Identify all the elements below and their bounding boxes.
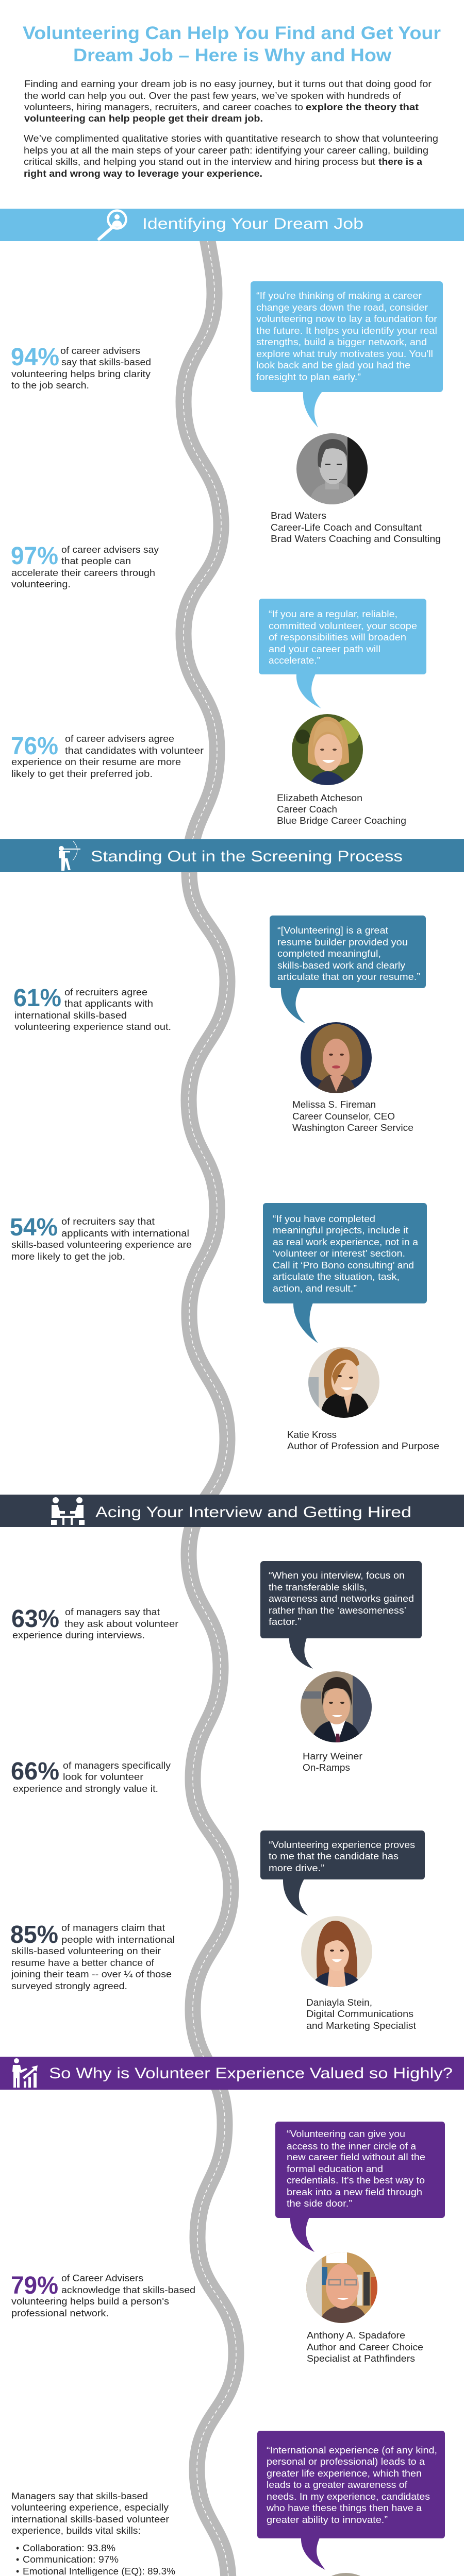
attribution: Katie Kross [287, 1430, 439, 1451]
intro paragraph 1: the world can help you out. Over the past few years, we’ve spoken with hundreds of [24, 91, 402, 101]
text block: vital skills list: volunteering experience, especially [11, 2502, 169, 2513]
callout: Katie Kross quote [263, 1203, 427, 1343]
stat: 97% [11, 543, 159, 589]
icon: presenter with rising chart [12, 2058, 38, 2088]
intro paragraph 2: right and wrong way to leverage your experience. [24, 168, 262, 179]
icon: two people at a table [51, 1497, 85, 1525]
intro paragraph 2: helps you at all the main steps of your career path: identifying your career calling, building [24, 145, 428, 156]
stat: 63%: they ask about volunteer [64, 1619, 178, 1629]
intro paragraph 1: volunteering can help people get their dream job. [24, 113, 263, 124]
callout: Anthony Spadafore quote: formal education and [287, 2164, 383, 2174]
callout: Harry Weiner quote: factor.” [269, 1617, 301, 1627]
icon: archer [59, 841, 80, 871]
text block: vital skills list [11, 2491, 175, 2576]
stat: 79% [11, 2272, 195, 2318]
text block: vital skills list: Communication: 97% [23, 2554, 119, 2565]
text block: vital skills list: Managers say that skills-based [11, 2491, 148, 2501]
attribution: Daniayla Stein: Daniayla Stein, [306, 1997, 372, 2008]
winding road [184, 227, 239, 2576]
section band: So Why is Volunteer Experience Valued so Highly? [0, 2057, 464, 2090]
callout: Harry B. Weiner quote: greater life experience, which then [267, 2468, 422, 2479]
callout: Brad Waters quote: “If you're thinking of making a career [256, 291, 422, 301]
intro paragraph 1: Finding and earning your dream job is no easy journey, but it turns out that doing good for [24, 79, 432, 89]
callout: Daniayla Stein quote [260, 1831, 425, 1916]
attribution: Harry Weiner: On-Ramps [303, 1762, 350, 1773]
stat: 54%: 54% [10, 1214, 58, 1241]
stat: 85% [10, 1921, 175, 1991]
photo: Anthony Spadafore [306, 2252, 377, 2323]
stat: 63%: of managers say that [65, 1607, 160, 1617]
stat: 61%: volunteering experience stand out. [14, 1022, 171, 1032]
stat: 66%: of managers specifically [63, 1760, 171, 1771]
callout: Harry B. Weiner quote: leads to a greater awareness of [267, 2480, 408, 2490]
stat: 94%: say that skills-based [61, 357, 151, 367]
callout: Harry B. Weiner quote: greater ability to innovate.” [267, 2515, 388, 2525]
callout: Daniayla Stein quote: more drive.” [269, 1863, 324, 1873]
stat: 79%: of Career Advisers [61, 2273, 143, 2283]
attribution: Harry Weiner: Harry Weiner [303, 1751, 362, 1761]
photo: Katie Kross [308, 1347, 379, 1418]
section band: Acing Your Interview and Getting Hired: Acing Your Interview and Getting Hired [95, 1504, 411, 1521]
attribution: Melissa Fireman: Melissa S. Fireman [292, 1099, 376, 1110]
callout: Harry B. Weiner quote: personal or professional) leads to a [267, 2456, 425, 2467]
callout: Anthony Spadafore quote: “Volunteering can give you [287, 2129, 405, 2139]
intro paragraph 2 [24, 133, 438, 179]
photo: Melissa Fireman [301, 1022, 372, 1093]
callout: Elizabeth Atcheson quote: committed volunteer, your scope [269, 621, 417, 631]
stat: 76%: 76% [11, 733, 58, 760]
stat: 61%: 61% [13, 985, 61, 1012]
stat: 76% [11, 733, 204, 779]
attribution: Brad Waters: Brad Waters Coaching and Consulting [271, 534, 441, 544]
intro paragraph 2: there is a [378, 157, 423, 167]
stat: 97%: of career advisers say [61, 545, 159, 555]
stat: 63%: 63% [11, 1605, 59, 1633]
stat: 79%: 79% [11, 2272, 58, 2299]
stat: 79%: volunteering helps build a person's [11, 2296, 169, 2307]
photo: Brad Waters [296, 433, 368, 504]
callout: Katie Kross quote: meaningful projects, include it [273, 1225, 408, 1235]
stat: 94%: 94% [11, 344, 59, 371]
callout: Brad Waters quote: change years down the road, consider [256, 302, 428, 313]
title: Dream Job – Here is Why and How [73, 45, 392, 65]
callout: Melissa Fireman quote [270, 916, 426, 1023]
callout: Harry Weiner quote: awareness and networks gained [269, 1594, 414, 1604]
callout: Elizabeth Atcheson quote: accelerate.” [269, 655, 320, 666]
attribution: Daniayla Stein: Digital Communications [306, 2009, 413, 2019]
callout: Daniayla Stein quote: to me that the candidate has [269, 1851, 399, 1861]
callout: Harry B. Weiner quote: “International experience (of any kind, [267, 2445, 437, 2455]
section band: Acing Your Interview and Getting Hired [0, 1495, 464, 1527]
callout: Brad Waters quote: foresight to plan early.” [256, 372, 361, 382]
stat: 79%: professional network. [11, 2308, 109, 2318]
callout: Elizabeth Atcheson quote: and your career path will [269, 644, 380, 654]
callout: Melissa Fireman quote: resume builder provided you [277, 937, 408, 947]
stat: 94%: of career advisers [60, 346, 140, 356]
stat: 76%: likely to get their preferred job. [11, 769, 153, 779]
stat: 63%: experience during interviews. [12, 1630, 145, 1640]
text block: vital skills list: Collaboration: 93.8% [23, 2543, 115, 2553]
callout: Katie Kross quote: as real work experience, not in a [273, 1237, 419, 1247]
section band: So Why is Volunteer Experience Valued so Highly?: So Why is Volunteer Experience Valued so Highly? [49, 2065, 453, 2082]
stat: 94%: to the job search. [11, 380, 89, 391]
callout: Elizabeth Atcheson quote: “If you are a regular, reliable, [269, 609, 397, 619]
section band: Standing Out in the Screening Process [0, 839, 464, 872]
stat: 85%: 85% [10, 1921, 58, 1948]
attribution: Brad Waters: Brad Waters [271, 511, 326, 521]
callout: Harry Weiner quote: the transferable skills, [269, 1582, 367, 1592]
callout: Katie Kross quote: action, and result.” [273, 1283, 357, 1294]
callout: Anthony Spadafore quote: access to the inner circle of a [287, 2141, 417, 2151]
stat: 66%: 66% [11, 1758, 59, 1785]
photo: Elizabeth Atcheson [292, 714, 363, 785]
callout: Brad Waters quote: volunteering now to lay a foundation for [256, 314, 437, 324]
stat: 76%: that candidates with volunteer [65, 745, 204, 756]
stat: 85%: of managers claim that [61, 1923, 165, 1933]
callout: Melissa Fireman quote: completed meaningful, [277, 948, 381, 959]
stat: 85%: people with international [61, 1935, 175, 1945]
attribution: Harry Weiner [303, 1751, 362, 1773]
callout: Melissa Fireman quote: skills-based work and clearly [277, 960, 405, 971]
attribution: Brad Waters [271, 511, 441, 544]
callout: Melissa Fireman quote: articulate that on your resume.” [277, 972, 420, 982]
callout: Brad Waters quote: explore what truly motivates you. You'll [256, 349, 433, 359]
callout: Harry B. Weiner quote: who have these things then have a [266, 2503, 422, 2513]
intro paragraph 2: We’ve complimented qualitative stories with quantitative research to show that volunteering [24, 133, 438, 144]
stat: 66% [11, 1758, 171, 1794]
attribution: Daniayla Stein [306, 1997, 416, 2031]
stat: 85%: resume have a better chance of [11, 1958, 155, 1968]
section band: Identifying Your Dream Job [0, 209, 464, 241]
text block: vital skills list: • [16, 2543, 19, 2553]
stat: 61% [13, 985, 171, 1032]
photo: Daniayla Stein [301, 1916, 372, 1987]
callout: Anthony Spadafore quote: break into a new field through [287, 2187, 422, 2197]
photo: Harry B. Weiner [332, 2573, 360, 2576]
callout: Elizabeth Atcheson quote [259, 599, 426, 708]
callout: Elizabeth Atcheson quote: of responsibilities will broaden [269, 632, 406, 642]
section band: Identifying Your Dream Job: Identifying Your Dream Job [142, 215, 363, 232]
attribution: Melissa Fireman: Career Counselor, CEO [292, 1111, 395, 1122]
callout: Brad Waters quote: look back and be glad you had the [256, 360, 410, 370]
callout: Katie Kross quote: Call it ‘Pro Bono consulting’ and [273, 1260, 414, 1270]
stat: 97%: volunteering. [11, 579, 71, 589]
callout: Katie Kross quote: “If you have completed [273, 1214, 375, 1224]
intro paragraph 2: critical skills, and helping you stand out in the interview and hiring process but [24, 157, 375, 167]
callout: Katie Kross quote: articulate the situation, task, [273, 1272, 400, 1282]
stat: 54% [10, 1214, 192, 1262]
section band: Standing Out in the Screening Process: Standing Out in the Screening Process [91, 848, 403, 865]
attribution: Katie Kross: Author of Profession and Purpose [287, 1441, 439, 1451]
text block: vital skills list: • [16, 2554, 19, 2565]
stat: 61%: of recruiters agree [64, 987, 147, 997]
callout: Harry B. Weiner quote: needs. In my experience, candidates [267, 2492, 430, 2502]
stat: 76%: experience on their resume are more [11, 757, 181, 767]
stat: 54%: skills-based volunteering experience are [11, 1240, 192, 1250]
stat: 97%: 97% [11, 543, 58, 570]
stat: 79%: acknowledge that skills-based [61, 2285, 195, 2295]
photo: Harry Weiner [301, 1671, 372, 1742]
stat: 85%: joining their team -- over ¼ of those [11, 1969, 172, 1979]
callout: Melissa Fireman quote: “[Volunteering] is a great [277, 925, 388, 936]
text block: vital skills list: experience, builds vital skills: [11, 2526, 141, 2536]
attribution: Katie Kross: Katie Kross [287, 1430, 337, 1440]
attribution: Brad Waters: Career-Life Coach and Consultant [271, 522, 422, 533]
callout: Brad Waters quote [251, 281, 443, 428]
callout: Katie Kross quote: ‘volunteer or interest’ section. [273, 1248, 405, 1259]
callout: Harry Weiner quote: “When you interview, focus on [269, 1570, 405, 1581]
title [23, 23, 441, 65]
stat: 97%: accelerate their careers through [11, 568, 155, 578]
callout: Daniayla Stein quote: “Volunteering experience proves [269, 1840, 415, 1850]
stat: 76%: of career advisers agree [65, 734, 174, 744]
attribution: Daniayla Stein: and Marketing Specialist [306, 2021, 416, 2031]
callout: Brad Waters quote: strengths, build a bigger network, and [256, 337, 427, 347]
stat: 61%: international skills-based [14, 1010, 127, 1021]
stat: 94%: volunteering helps bring clarity [11, 369, 151, 379]
title: Volunteering Can Help You Find and Get Your [23, 23, 441, 43]
callout: Harry B. Weiner quote [257, 2431, 445, 2570]
callout: Harry Weiner quote [260, 1561, 422, 1669]
callout: Anthony Spadafore quote: the side door.” [287, 2198, 352, 2209]
attribution: Elizabeth Atcheson [277, 793, 406, 826]
stat: 54%: applicants with international [61, 1228, 189, 1239]
callout: Brad Waters quote: the future. It helps you identify your real [256, 326, 437, 336]
icon: magnifying glass with person [99, 210, 126, 239]
stat: 61%: that applicants with [64, 998, 153, 1009]
text block: vital skills list: international skills-based volunteer [11, 2514, 169, 2524]
attribution: Elizabeth Atcheson: Elizabeth Atcheson [277, 793, 362, 803]
stat: 85%: surveyed strongly agreed. [11, 1981, 127, 1991]
attribution: Elizabeth Atcheson: Career Coach [277, 804, 337, 815]
attribution: Anthony Spadafore: Anthony A. Spadafore [307, 2330, 405, 2341]
stat: 63% [11, 1605, 178, 1640]
stat: 66%: experience and strongly value it. [13, 1784, 158, 1794]
attribution: Anthony Spadafore [307, 2330, 423, 2364]
intro paragraph 1 [24, 79, 432, 124]
attribution: Anthony Spadafore: Author and Career Choice [307, 2342, 423, 2352]
stat: 54%: of recruiters say that [61, 1216, 155, 1227]
stat: 66%: look for volunteer [63, 1772, 143, 1782]
attribution: Melissa Fireman [292, 1099, 413, 1133]
attribution: Elizabeth Atcheson: Blue Bridge Career Coaching [277, 816, 406, 826]
attribution: Anthony Spadafore: Specialist at Pathfinders [307, 2353, 415, 2364]
callout: Anthony Spadafore quote: new career field without all the [287, 2152, 425, 2162]
stat: 85%: skills-based volunteering on their [11, 1946, 161, 1956]
intro paragraph 1: explore the theory that [306, 102, 419, 112]
stat: 97%: that people can [61, 556, 131, 566]
attribution: Melissa Fireman: Washington Career Service [292, 1123, 413, 1133]
stat: 54%: more likely to get the job. [11, 1251, 125, 1262]
callout: Anthony Spadafore quote [275, 2122, 445, 2252]
callout: Harry Weiner quote: rather than the ‘awesomeness’ [269, 1605, 406, 1616]
intro paragraph 1: volunteers, hiring managers, recruiters, and career coaches to [24, 102, 303, 112]
stat: 94% [11, 344, 151, 391]
callout: Anthony Spadafore quote: credentials. It's the best way to [287, 2175, 425, 2185]
